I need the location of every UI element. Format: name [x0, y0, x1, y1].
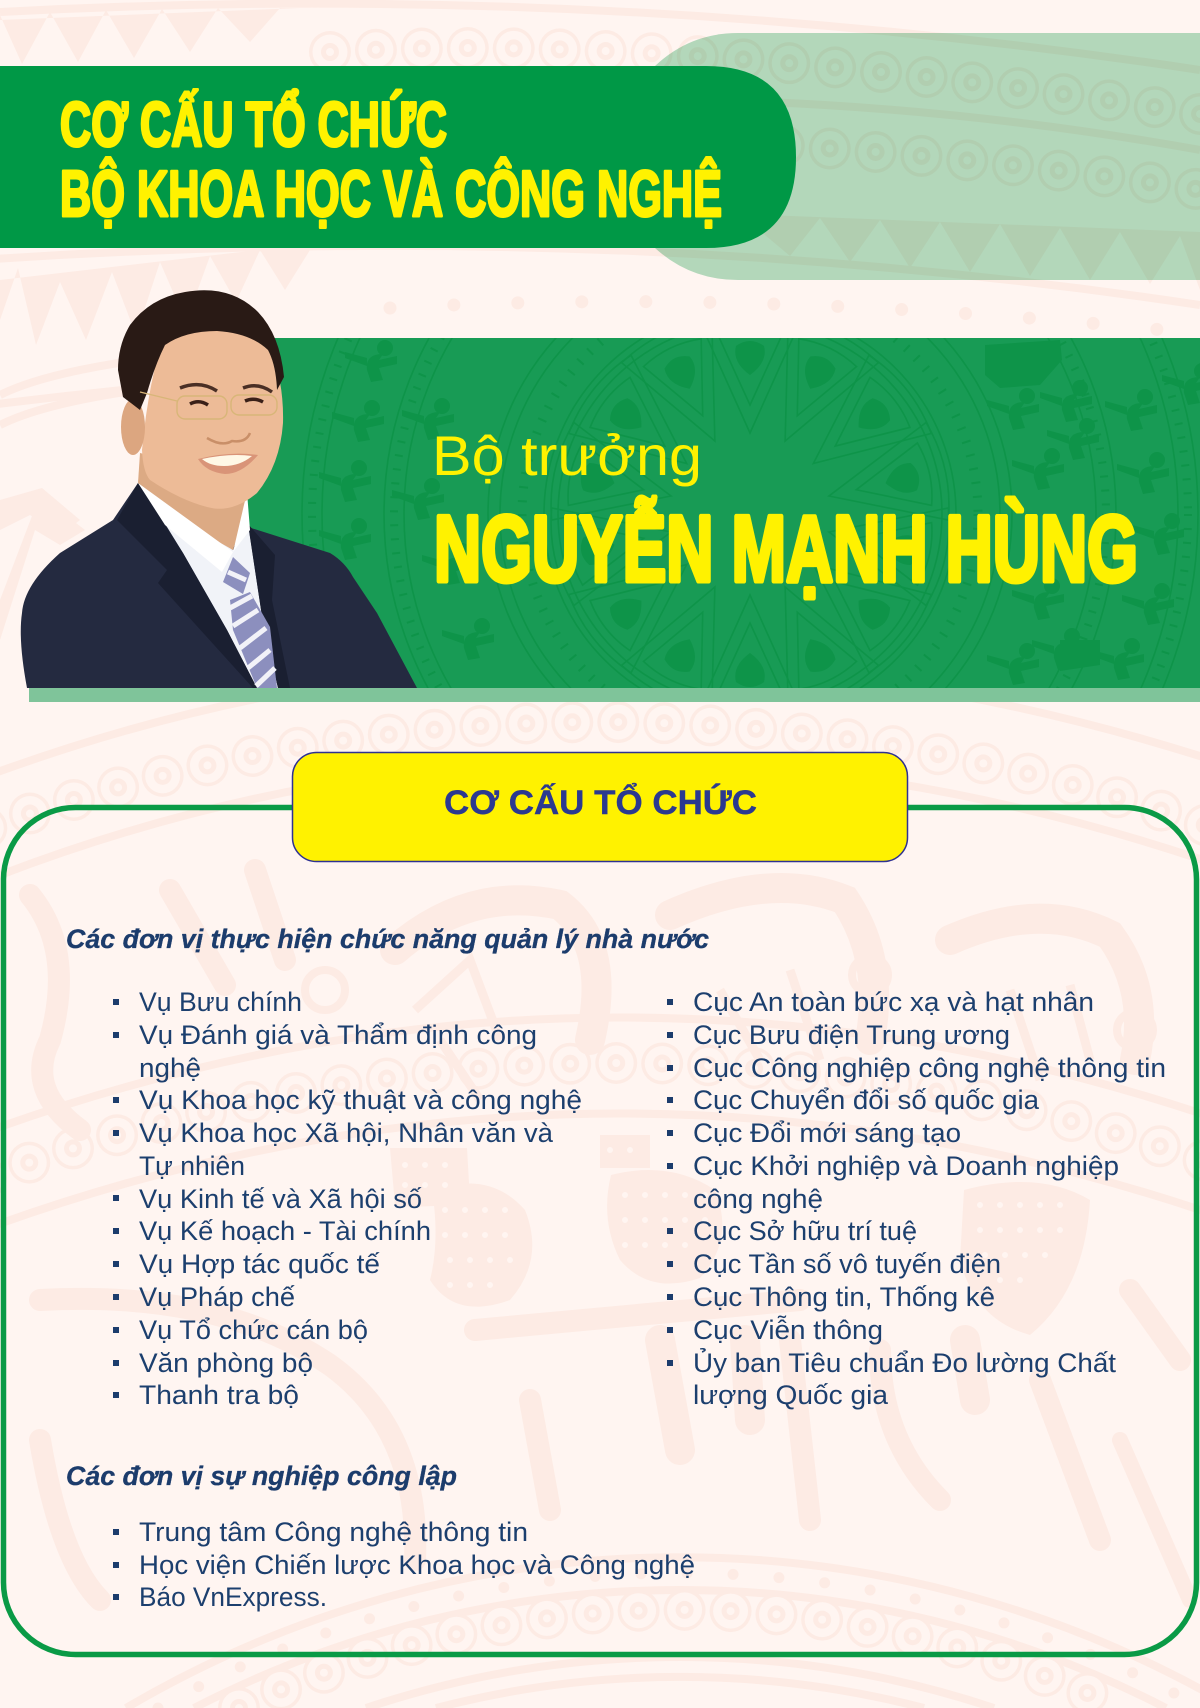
list: left column departments: Văn phòng bộ: [139, 1348, 313, 1378]
list: left column departments: Vụ Tổ chức cán bộ: [139, 1315, 368, 1345]
necktie: [223, 557, 250, 594]
heading: state management units: Các đơn vị thực hiện chức năng quản lý nhà nước: [66, 924, 709, 954]
title text: BỘ KHOA HỌC VÀ CÔNG NGHỆ: [60, 157, 722, 230]
list: left column departments: Vụ Khoa học kỹ thuật và công nghệ: [139, 1085, 582, 1115]
panel: organizational structure frame: [4, 808, 1196, 1654]
hair: [118, 290, 284, 410]
list: public service units: Trung tâm Công nghệ thông tin: [139, 1517, 528, 1547]
list: left column departments: Vụ Hợp tác quốc tế: [139, 1249, 380, 1279]
glasses: [140, 392, 277, 419]
list: right column agencies: Cục Đổi mới sáng tạo: [693, 1118, 961, 1148]
list: right column agencies: Cục Sở hữu trí tuệ: [693, 1216, 917, 1246]
list: left column departments: Vụ Bưu chính: [139, 987, 302, 1017]
list: right column agencies: Ủy ban Tiêu chuẩn Đo lường Chất: [693, 1348, 1117, 1378]
section button: [292, 752, 908, 862]
list: left column departments: Vụ Pháp chế: [139, 1282, 295, 1312]
shirt: [140, 483, 278, 688]
list: right column agencies: lượng Quốc gia: [693, 1380, 888, 1410]
title text: [60, 89, 722, 230]
list: right column agencies: Cục Chuyển đổi số quốc gia: [693, 1085, 1039, 1115]
list: left column departments: Vụ Kế hoạch - Tài chính: [139, 1216, 431, 1246]
list: right column agencies: Cục Công nghiệp công nghệ thông tin: [693, 1053, 1166, 1083]
list: right column agencies: Cục An toàn bức xạ và hạt nhân: [693, 987, 1094, 1017]
list: left column departments: Vụ Khoa học Xã hội, Nhân văn và: [139, 1118, 553, 1148]
list: right column agencies: Cục Viễn thông: [693, 1315, 883, 1345]
drum pattern on banner: [302, 338, 1200, 688]
list: left column departments: Vụ Đánh giá và Thẩm định công: [139, 1020, 537, 1050]
eyes: [190, 399, 263, 405]
list: left column departments: Thanh tra bộ: [139, 1380, 299, 1410]
eyebrows: [180, 385, 272, 392]
minister banner: [29, 338, 1200, 702]
list: right column agencies: Cục Khởi nghiệp và Doanh nghiệp: [693, 1151, 1119, 1181]
list: right column agencies: Cục Bưu điện Trung ương: [693, 1020, 1010, 1050]
list: left column departments: Vụ Kinh tế và Xã hội số: [139, 1184, 422, 1214]
neck: [138, 453, 247, 550]
heading: public service units: Các đơn vị sự nghiệp công lập: [66, 1461, 457, 1491]
list: left column departments: Tự nhiên: [139, 1151, 245, 1181]
list: public service units: Học viện Chiến lược Khoa học và Công nghệ: [139, 1550, 695, 1580]
smile: [198, 454, 258, 474]
portrait of minister: [21, 290, 417, 688]
suit: [21, 483, 417, 688]
right lapel: [248, 524, 290, 688]
list: left column departments: nghệ: [139, 1053, 201, 1083]
left lapel: [117, 483, 257, 688]
list: public service units: [113, 1517, 695, 1612]
list: right column agencies: Cục Tần số vô tuyến điện: [693, 1249, 1001, 1279]
list: right column agencies: Cục Thông tin, Thống kê: [693, 1282, 995, 1312]
birds and animals on banner: [319, 340, 1200, 685]
list: right column agencies: công nghệ: [693, 1184, 823, 1214]
nose: [207, 433, 250, 443]
decorative birds: [30, 870, 1190, 1600]
pale green title backdrop: [655, 33, 1200, 280]
title text: CƠ CẤU TỔ CHỨC: [60, 89, 447, 160]
minister title: Bộ trưởng: [432, 424, 702, 487]
face: [142, 330, 283, 509]
list: left column departments: [113, 987, 582, 1410]
list: right column agencies: [667, 987, 1166, 1410]
list: public service units: Báo VnExpress.: [139, 1582, 327, 1612]
section button: CƠ CẤU TỔ CHỨC: [444, 784, 757, 822]
title banner: [0, 66, 796, 248]
